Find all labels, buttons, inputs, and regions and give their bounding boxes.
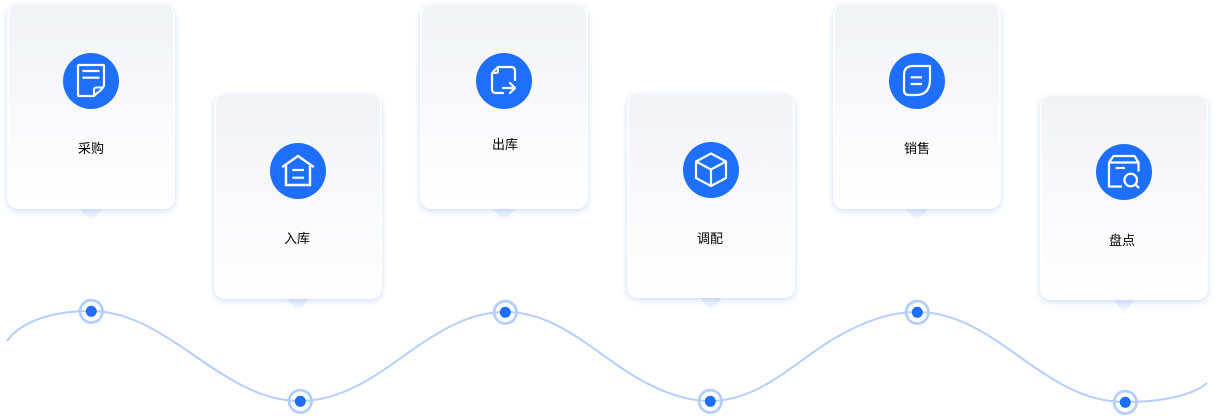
icon: outbound document <box>476 53 532 109</box>
icon: note <box>889 53 945 109</box>
timeline node 3 <box>492 300 518 325</box>
panel: 出库 <box>417 4 591 220</box>
panel: 销售 <box>830 4 1004 220</box>
timeline node 2 <box>288 388 313 414</box>
icon: warehouse <box>270 143 326 199</box>
icon: box search <box>1096 144 1152 200</box>
panel: 盘点 <box>1037 95 1211 310</box>
label: 盘点 <box>1109 233 1135 248</box>
panel: 采购 <box>4 4 178 220</box>
icon: document <box>63 53 119 109</box>
label: 入库 <box>284 231 310 246</box>
label: 调配 <box>697 231 723 246</box>
panel: 入库 <box>211 94 385 310</box>
label: 出库 <box>492 137 518 152</box>
icon: cube <box>683 142 739 198</box>
label: 采购 <box>78 141 104 156</box>
timeline node 6 <box>1112 390 1138 415</box>
timeline node 4 <box>698 388 723 414</box>
timeline node 1 <box>78 298 104 324</box>
timeline node 5 <box>904 300 930 325</box>
panel: 调配 <box>624 93 798 308</box>
label: 销售 <box>904 141 930 156</box>
